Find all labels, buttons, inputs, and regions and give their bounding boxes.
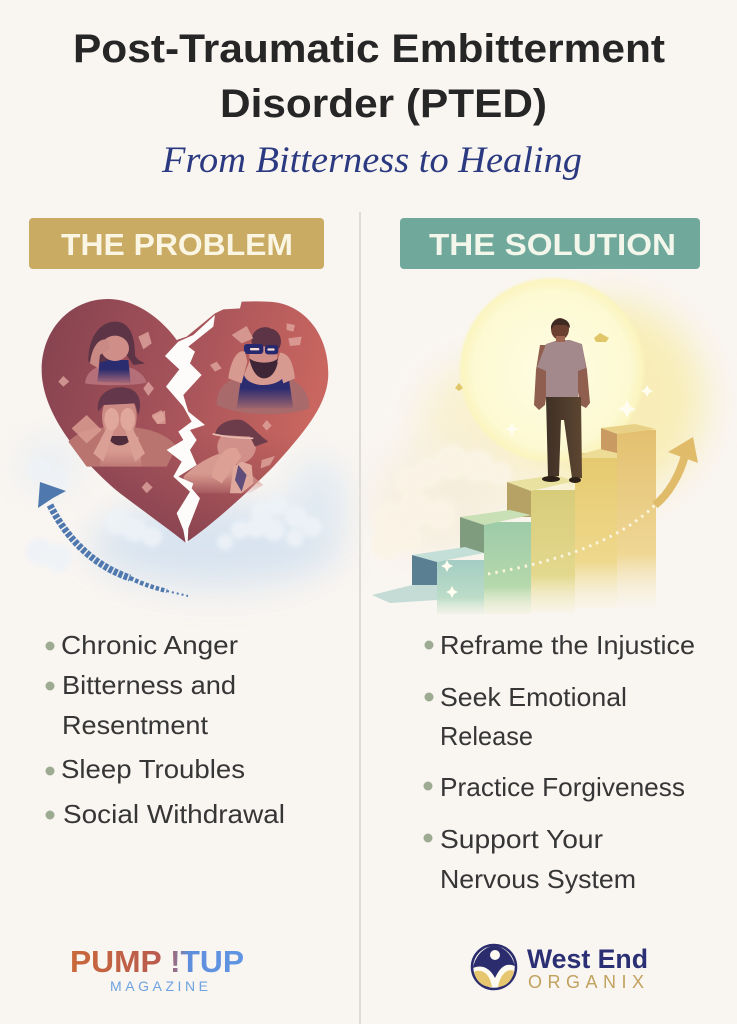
stair steps <box>372 424 656 614</box>
heading: the problem: THE PROBLEM <box>61 227 293 262</box>
list: solution steps: Nervous System <box>440 864 636 894</box>
title: Disorder (PTED) <box>220 82 547 126</box>
list: solution steps: Support Your <box>440 824 603 854</box>
subtitle: From Bitterness to Healing <box>161 140 582 181</box>
crack <box>165 315 215 543</box>
logo: West End Organix: ORGANIX <box>528 972 644 992</box>
heading: the solution <box>400 218 700 269</box>
title: Post-Traumatic Embitterment <box>73 27 665 71</box>
panel: broken heart illustration <box>22 299 346 596</box>
figure: man with glasses <box>217 327 309 414</box>
figure: woman covering face <box>85 322 147 385</box>
figure: man with hands over eyes <box>68 387 177 467</box>
list: problem symptoms <box>46 630 285 829</box>
list: solution steps: Release <box>440 721 533 751</box>
list: problem symptoms: Sleep Troubles <box>61 754 245 784</box>
logo: Pump It Up Magazine: MAGAZINE <box>110 978 208 994</box>
heart halves and figures <box>42 299 328 543</box>
person standing <box>534 318 590 483</box>
list: solution steps: Practice Forgiveness <box>440 772 685 802</box>
list: problem symptoms: Social Withdrawal <box>63 799 285 829</box>
arrow: descending dotted blue <box>38 482 188 596</box>
list: solution steps <box>424 630 695 894</box>
list: problem symptoms: Bitterness and <box>62 670 236 700</box>
figure: person crying <box>183 420 268 493</box>
heading: the problem <box>29 218 324 269</box>
list: problem symptoms: Resentment <box>62 710 209 740</box>
list: problem symptoms: Chronic Anger <box>61 630 238 660</box>
clouds behind heart <box>22 441 346 587</box>
heading: the solution: THE SOLUTION <box>429 227 676 262</box>
logo: Pump It Up Magazine: PUMP !TUP <box>70 944 244 979</box>
title <box>73 27 665 126</box>
logo: West End Organix <box>472 944 648 992</box>
arrow: rising dotted gold <box>488 437 698 574</box>
list: solution steps: Reframe the Injustice <box>440 630 695 660</box>
logo: Pump It Up Magazine <box>70 944 244 994</box>
sparkles <box>441 385 653 598</box>
glow and clouds <box>371 278 705 559</box>
logo: West End Organix: West End <box>527 944 648 974</box>
list: solution steps: Seek Emotional <box>440 682 627 712</box>
floating paper shards <box>58 323 302 493</box>
panel: staircase illustration <box>371 278 705 614</box>
